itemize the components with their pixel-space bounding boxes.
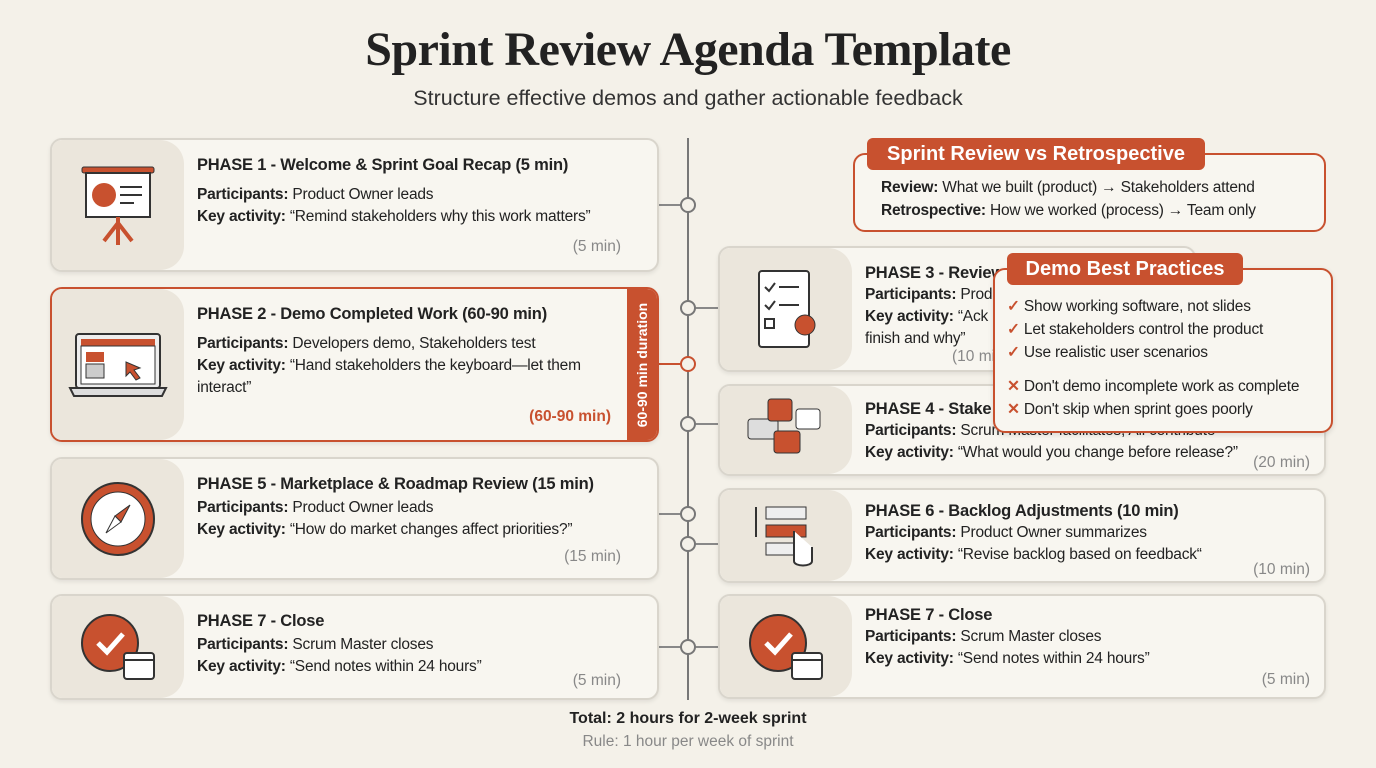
card: phase 7 left: (5 min)	[573, 672, 621, 689]
card: phase 1: (5 min)	[573, 238, 621, 255]
callout: demo best practices	[992, 253, 1334, 436]
icon: check calendar	[52, 596, 184, 698]
card: phase 7 left: Key activity: “Send notes within 24 hours”	[197, 658, 482, 675]
duration strip	[627, 289, 657, 440]
card: phase 2: Participants: Developers demo, Stakeholders test	[197, 335, 535, 352]
callout: review vs retrospective: Review: What we built (product) → Stakeholders attend	[881, 179, 1255, 196]
card: phase 6: Key activity: “Revise backlog based on feedback“	[865, 546, 1202, 563]
card: phase 7 left: Participants: Scrum Master closes	[197, 636, 433, 653]
card: phase 7 right: Key activity: “Send notes within 24 hours”	[865, 650, 1150, 667]
card: phase 6: PHASE 6 - Backlog Adjustments (10 min)	[865, 502, 1179, 520]
card: phase 4: Key activity: “What would you change before release?”	[865, 444, 1238, 461]
card: phase 1	[50, 138, 659, 272]
card: phase 4: PHASE 4 - Stake	[865, 400, 991, 418]
card: phase 3: Participants: Prod	[865, 286, 992, 303]
card: phase 7 right: Participants: Scrum Master closes	[865, 628, 1101, 645]
icon: speech bubbles	[720, 386, 852, 474]
callout: demo best practices: ✓ Show working software, not slides	[1007, 298, 1251, 315]
callout heading: Demo Best Practices	[1026, 258, 1224, 280]
card: phase 5: (15 min)	[564, 548, 621, 565]
card: phase 7 right: PHASE 7 - Close	[865, 606, 992, 624]
card: phase 3: (10 mi	[952, 348, 995, 365]
card: phase 7 left	[50, 594, 659, 700]
callout: demo best practices: ✓ Use realistic user scenarios ✕ Don't demo incomplete work as complete	[1007, 344, 1299, 395]
card: phase 5: PHASE 5 - Marketplace & Roadmap Review (15 min)	[197, 475, 594, 493]
card: phase 3: PHASE 3 - Review	[865, 264, 1004, 282]
card: phase 2: PHASE 2 - Demo Completed Work (60-90 min)	[197, 305, 547, 323]
callout: demo best practices: ✓ Let stakeholders control the product	[1007, 321, 1263, 338]
callout heading	[1007, 253, 1243, 285]
footer total: Total: 2 hours for 2-week sprint	[569, 710, 807, 727]
card: phase 6: Participants: Product Owner summarizes	[865, 524, 1147, 541]
callout: review vs retrospective: Retrospective: How we worked (process) → Team only	[881, 202, 1256, 219]
callout heading: Sprint Review vs Retrospective	[887, 143, 1185, 165]
card: phase 4	[718, 384, 1326, 476]
callout: review vs retrospective	[853, 138, 1326, 232]
card: phase 7 left: PHASE 7 - Close	[197, 612, 324, 630]
card: phase 4: (20 min)	[1253, 454, 1310, 471]
card: phase 6	[718, 488, 1326, 583]
card: phase 7 right	[718, 594, 1326, 699]
card: phase 3: finish and why”	[865, 330, 965, 347]
duration strip: 60-90 min duration	[634, 302, 650, 427]
icon: laptop	[52, 289, 184, 440]
card: phase 3	[718, 246, 1196, 372]
title: Sprint Review Agenda Template	[365, 23, 1011, 76]
card: phase 1: PHASE 1 - Welcome & Sprint Goal Recap (5 min)	[197, 156, 568, 174]
card: phase 1: Key activity: “Remind stakeholders why this work matters”	[197, 208, 590, 225]
card: phase 5: Participants: Product Owner leads	[197, 499, 433, 516]
card: phase 5: Key activity: “How do market changes affect priorities?”	[197, 521, 572, 538]
card: phase 2	[50, 287, 659, 442]
card: phase 5	[50, 457, 659, 580]
icon: checklist	[720, 248, 852, 370]
card: phase 3: Key activity: “Ack	[865, 308, 988, 325]
icon: compass	[52, 459, 184, 578]
card: phase 7 right: (5 min)	[1262, 671, 1310, 688]
icon: presentation board	[52, 140, 184, 270]
card: phase 1: Participants: Product Owner leads	[197, 186, 433, 203]
icon: check calendar	[720, 596, 852, 697]
card: phase 2: Key activity: “Hand stakeholders the keyboard—let them	[197, 357, 581, 374]
subtitle: Structure effective demos and gather actionable feedback	[413, 86, 963, 110]
card: phase 2: interact”	[197, 379, 251, 396]
callout: demo best practices: ✕ Don't skip when sprint goes poorly	[1007, 401, 1253, 418]
timeline line	[687, 138, 689, 700]
card: phase 6: (10 min)	[1253, 561, 1310, 578]
card: phase 2: (60-90 min)	[529, 408, 611, 425]
icon: backlog	[720, 490, 852, 581]
footer rule: Rule: 1 hour per week of sprint	[582, 733, 794, 750]
callout heading	[867, 138, 1205, 170]
card: phase 4: Participants: Scrum Master facilitates, All contribute	[865, 422, 1215, 439]
